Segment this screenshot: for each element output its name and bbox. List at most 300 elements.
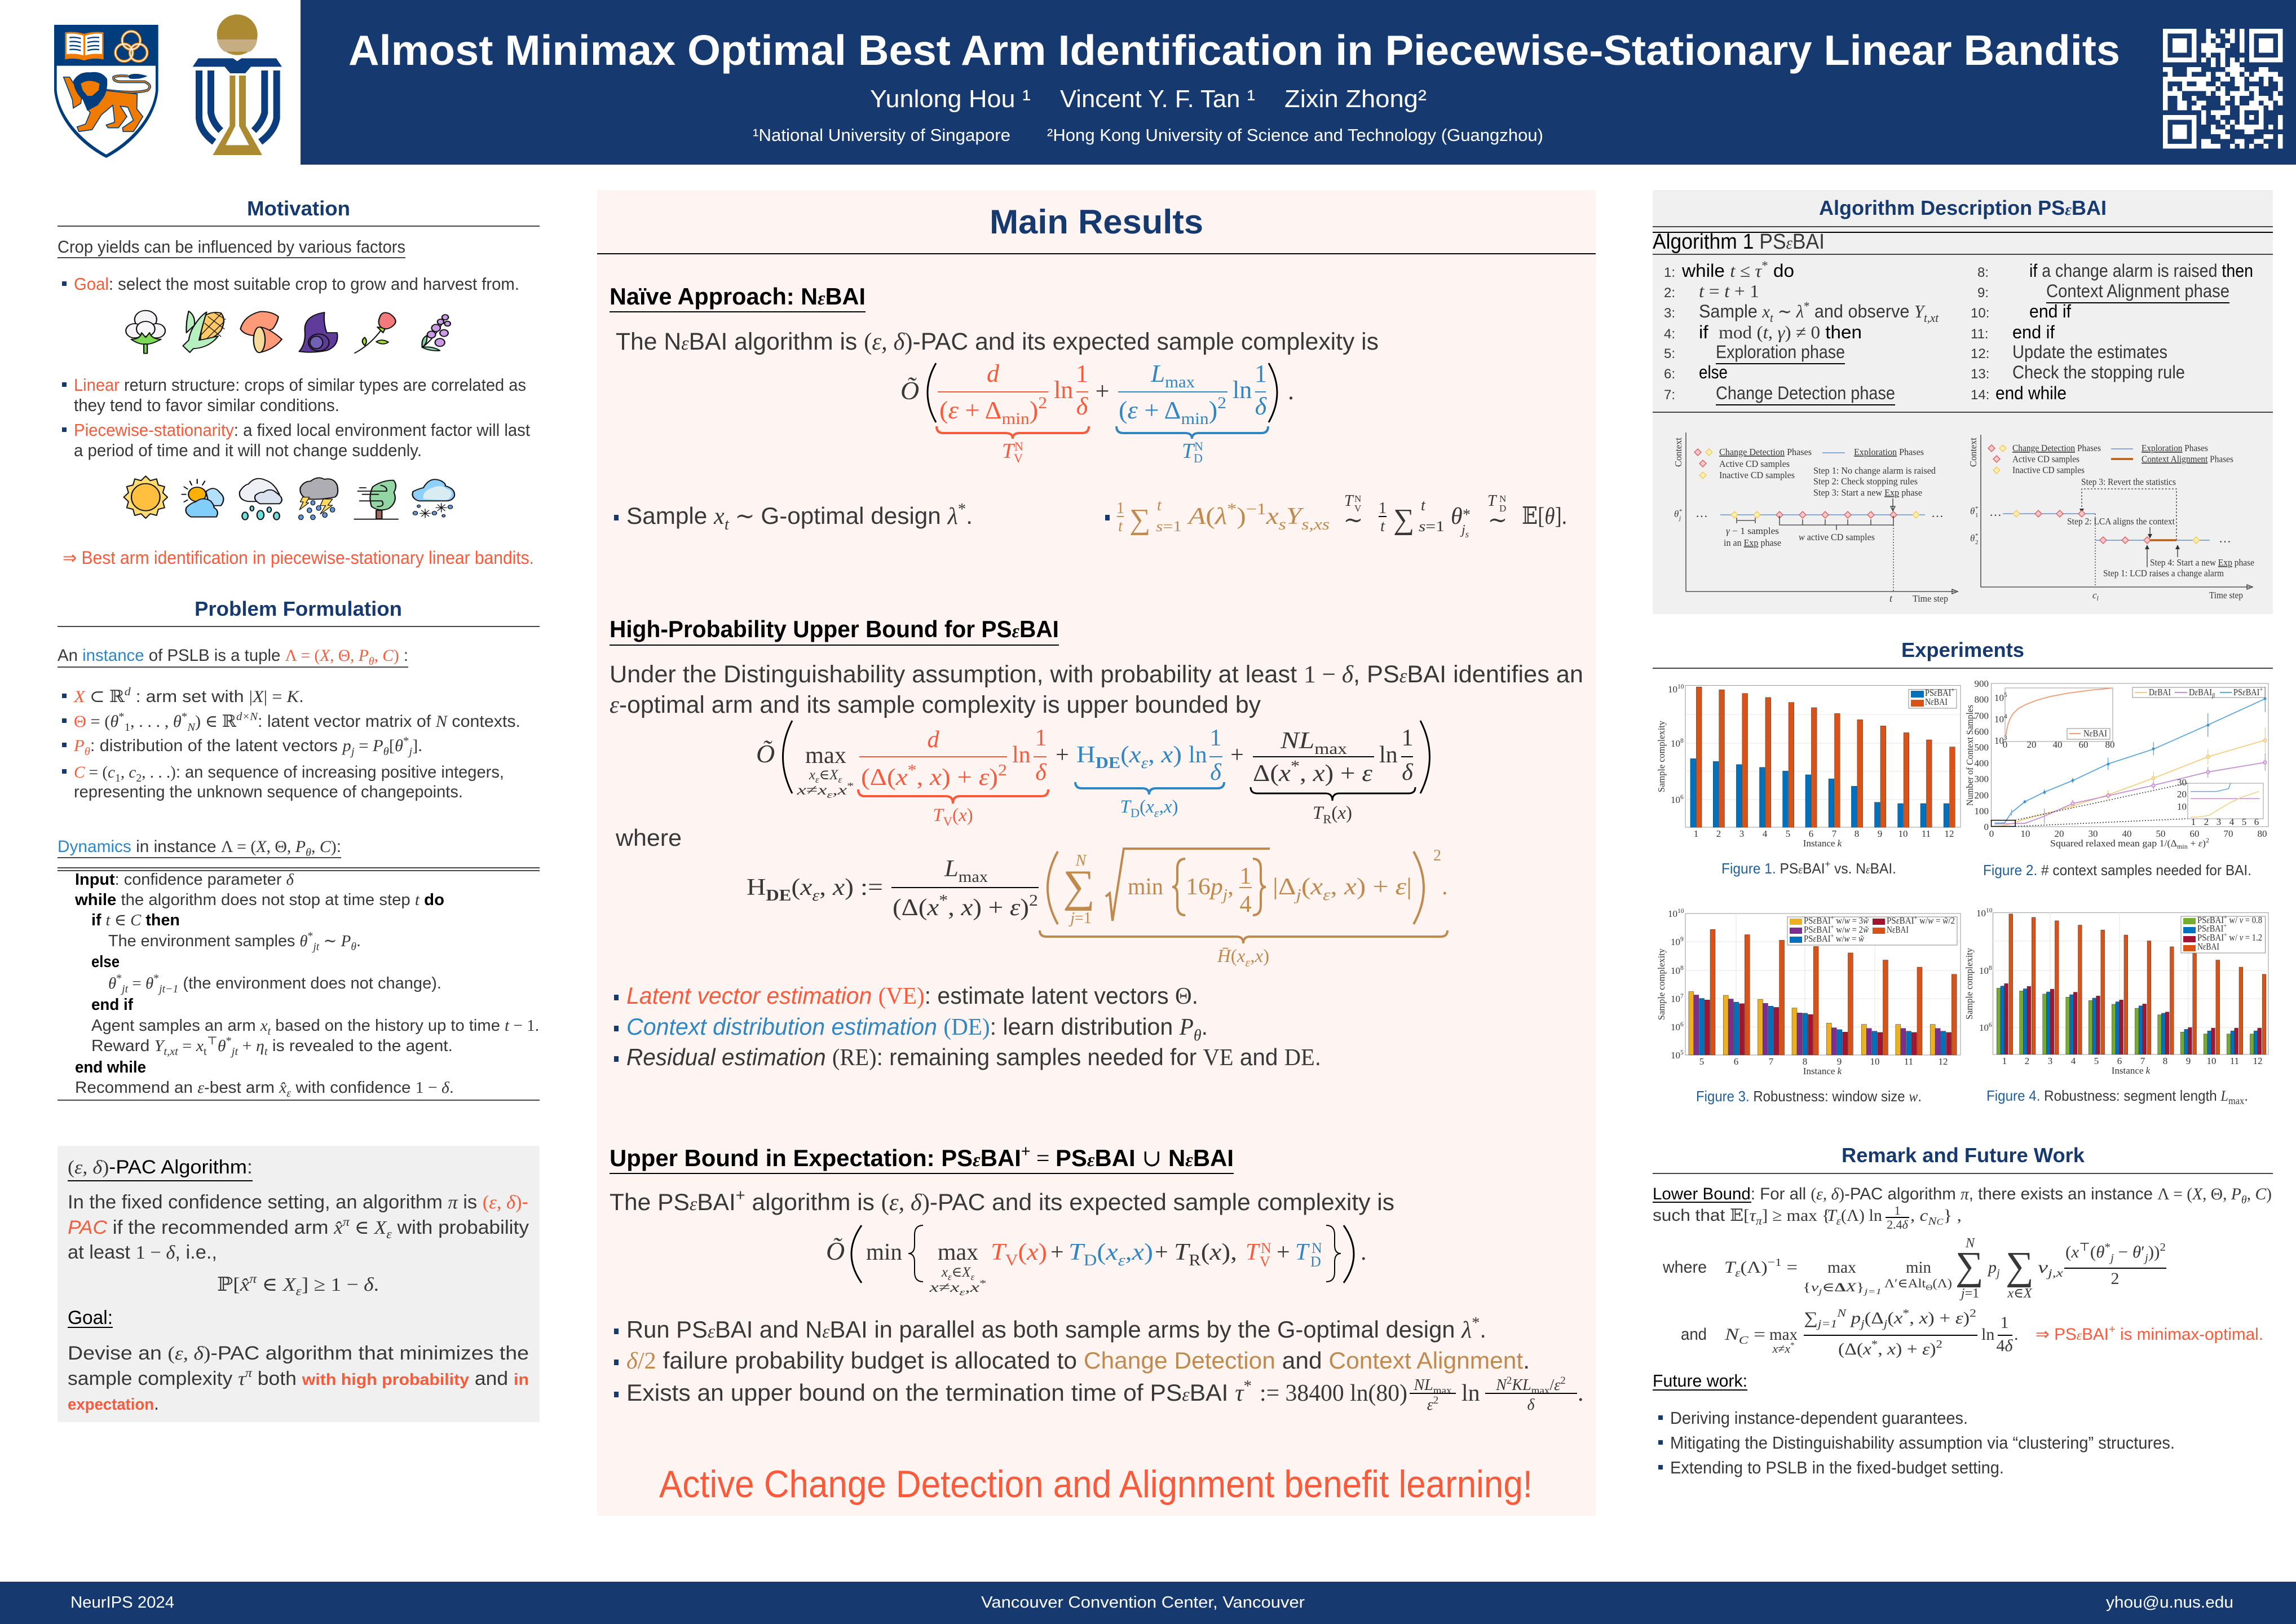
algorithm box: dynamics (58, 868, 540, 1100)
brace label: T_R(x): TR(x) (1313, 803, 1352, 826)
formula: expectation bound: N (1312, 1240, 1322, 1256)
formula: expectation bound: TR(x), (1174, 1239, 1237, 1269)
formula: H_DE definition: HDE(xε, x) := (747, 875, 883, 904)
formula: naive complexity: 1 (1076, 360, 1088, 387)
bullets: estimation components (614, 982, 1321, 1071)
inset: zoomed low-gap region: 5 (2242, 817, 2246, 827)
diagram: context alignment phases: Context Alignment Phases (2142, 453, 2233, 465)
inset: NεBAI curve: 105 (1994, 691, 2007, 703)
formula: N_C definition: 4δ (1997, 1336, 2014, 1355)
brace label: T_V^N: N (1014, 439, 1023, 453)
bullet: piecewise-stationarity: Piecewise-stationarity: a fixed local environment factor will last (74, 420, 530, 440)
bullets: estimation components: Context distribution estimation (DE): learn distribution Pθ. (626, 1013, 1208, 1044)
diagram: context alignment phases: θ (1970, 533, 1975, 544)
tick labels: 30 (2089, 828, 2098, 839)
text: goal description: sample complexity τπ both with high probability and in (68, 1366, 529, 1389)
diagram: context alignment phases: … (2219, 531, 2231, 545)
bullet: estimator convergence formula: t (1421, 497, 1426, 514)
formula: naive complexity: δ (1255, 392, 1268, 420)
formula: naive complexity: (ε + Δmin)2 (939, 394, 1047, 428)
bullet: estimator convergence formula: ∼ (1487, 508, 1508, 533)
callout: best arm identification: ⇒ Best arm identification in piecewise-stationary linear bandits. (63, 548, 534, 568)
algorithm box: dynamics: end while (75, 1058, 146, 1076)
tick labels: 100 (1975, 806, 1989, 817)
diagram: change detection phases: Step 1: No change alarm is raised (1813, 465, 1936, 476)
diagram: context alignment phases: 1 (1975, 512, 1978, 519)
bullets: problem definitions: X ⊂ ℝd : arm set with |X| = K. (73, 686, 304, 706)
formula: high-probability bound: + (1056, 742, 1069, 768)
axis labels: 8 (1803, 1056, 1807, 1067)
axis labels: 8 (1855, 828, 1859, 839)
bullet: estimator convergence formula: 1 (1379, 500, 1387, 517)
algorithm listing: right column: 11: (1971, 326, 1989, 342)
subheading: naive approach: Naïve Approach: NεBAI (610, 283, 866, 310)
inset: zoomed low-gap region: 4 (2229, 817, 2235, 827)
axis labels: 3 (1739, 828, 1744, 839)
formula: high-probability bound (756, 721, 1430, 800)
formula: expectation bound: Õ (826, 1237, 845, 1265)
algorithm box: dynamics: else (91, 953, 120, 971)
panel: motivation (58, 197, 540, 568)
caption: figure 1: Figure 1. PSεBAI+ vs. NεBAI. (1721, 858, 1896, 877)
algorithm listing: right column: Check the stopping rule (2012, 362, 2185, 382)
brace label: H-bar (1040, 930, 1447, 969)
heading: Algorithm Description: Algorithm Description PSεBAI (1819, 196, 2107, 219)
bullet: estimator convergence formula: D (1499, 503, 1506, 514)
text: lower bound: such that 𝔼[τπ] ≥ max { (1653, 1206, 1830, 1228)
formula: high-probability bound: ln (1012, 742, 1031, 768)
formula: high-probability bound: 1 (1035, 725, 1047, 751)
formula: naive complexity: ln (1054, 376, 1073, 404)
inset: NεBAI curve: 80 (2105, 739, 2114, 750)
axis labels (1964, 907, 2262, 1076)
bullets: algorithm properties: δ (1527, 1396, 1535, 1414)
markers (2023, 697, 2267, 807)
bullet: estimator convergence formula: V (1354, 503, 1362, 514)
diagram: change detection phases: Context (1673, 438, 1684, 467)
legend: NεBAI (1925, 696, 1948, 707)
formula: T_ε definition: max (1827, 1258, 1856, 1277)
axis labels: 6 (1809, 828, 1813, 839)
formula: high-probability bound: max (805, 743, 846, 769)
bullet: estimator convergence formula: t (1157, 497, 1162, 514)
diagram: context alignment phases: * (1975, 505, 1978, 512)
bullets: problem definitions: representing the unknown sequence of changepoints. (74, 783, 463, 801)
bullet: linear return structure: they tend to favor similar conditions. (74, 395, 339, 415)
axis labels: 12 (1939, 1056, 1948, 1067)
axis labels: 5 (2094, 1056, 2099, 1066)
formula: high-probability bound: Õ (756, 739, 775, 768)
bullets: algorithm properties: δ/2 failure probability budget is allocated to Change Detection and Context Alignment. (626, 1347, 1530, 1374)
axis labels: 4 (2071, 1056, 2076, 1066)
brace label: T_D(x,x): TD(xε,x) (1120, 797, 1178, 820)
bullet: goal: Goal: select the most suitable crop to grow and harvest from. (74, 274, 519, 294)
diagram: change detection phases: Exploration Phases (1854, 447, 1924, 457)
tick labels: 800 (1975, 694, 1989, 705)
axis labels: Sample complexity (1964, 948, 1975, 1020)
text: lower bound: 1 (1895, 1203, 1900, 1217)
heading: Main Results: Main Results (990, 203, 1203, 241)
text: lower bound: Lower Bound: For all (ε, δ)-PAC algorithm π, there exists an instance Λ = (X, Θ, Pθ, C) (1653, 1185, 2272, 1206)
axis labels: Sample complexity (1656, 948, 1667, 1020)
axis labels: 1010 (1976, 907, 1993, 919)
heading: Experiments: Experiments (1901, 638, 2024, 661)
algorithm box: dynamics: if t ∈ C then (91, 911, 180, 929)
icon: rose (355, 312, 396, 353)
axis labels: 3 (2048, 1056, 2052, 1066)
diagram: change detection phases: t (1889, 593, 1893, 604)
callout: active change detection: Active Change Detection and Alignment benefit learning! (659, 1463, 1533, 1506)
bars: segment lengths (1997, 914, 2266, 1054)
bullets: estimation components: Residual estimation (RE): remaining samples needed for VE and DE. (626, 1044, 1321, 1071)
algorithm listing: left column: 6: (1664, 367, 1675, 382)
legend: NεBAI (1887, 924, 1909, 935)
inset: NεBAI curve: 20 (2026, 739, 2037, 750)
formula: expectation bound: max (938, 1239, 978, 1265)
algorithm listing: left column: Exploration phase (1716, 342, 1845, 362)
diagram: context alignment phases: Step 2: LCA aligns the context (2067, 516, 2175, 527)
legend: PSεBAI+ (2233, 686, 2263, 698)
bullet: estimator convergence formula: T (1487, 492, 1498, 510)
algorithm listing: left column: 3: (1664, 306, 1675, 321)
formula: high-probability bound: (Δ(x*, x) + ε)2 (861, 762, 1007, 791)
formula: H_DE definition: 2 (1433, 847, 1441, 864)
algorithm listing: left column: while t ≤ τ* do (1681, 259, 1794, 281)
formula: H_DE definition: . (1442, 874, 1448, 900)
diagram: change detection phases: Inactive CD samples (1719, 470, 1795, 480)
inset: zoomed low-gap region: 2 (2204, 817, 2209, 827)
bullets: future work: Extending to PSLB in the fixed-budget setting. (1670, 1458, 2004, 1477)
axis labels: 6 (2117, 1056, 2122, 1066)
formula: expectation bound (826, 1225, 1367, 1298)
axis labels: 5 (1699, 1056, 1704, 1067)
algorithm listing: right column: 14: (1971, 387, 1989, 403)
axis labels: 4 (1763, 828, 1768, 839)
diagram: context alignment phases: Inactive CD samples (2012, 465, 2085, 475)
axis labels: 105 (1671, 1049, 1684, 1061)
algorithm box: dynamics: Input: confidence parameter δ (75, 871, 294, 889)
algorithm listing: right column: end if (2029, 301, 2071, 321)
chart: figure 4 bars (1964, 907, 2268, 1076)
panel: PAC algorithm (58, 1146, 540, 1422)
panel: experiments (1653, 638, 2273, 1106)
diagram: change detection phases: Step 2: Check stopping rules (1813, 476, 1918, 487)
legend (2132, 686, 2265, 699)
text: naive claim: The NεBAI algorithm is (ε, δ)-PAC and its expected sample complexity is (616, 328, 1379, 355)
bullet: estimator convergence formula: N (1354, 493, 1361, 504)
icon: corn (183, 311, 226, 352)
formula: naive complexity: + (1096, 377, 1109, 405)
legend: DεBAIβ (2189, 687, 2215, 699)
text: PAC definition: In the fixed confidence setting, an algorithm π is (ε, δ)- (68, 1191, 528, 1213)
axis labels: Instance k (1803, 1066, 1842, 1076)
text: goal description: Devise an (ε, δ)-PAC algorithm that minimizes the (68, 1343, 529, 1364)
heading: Problem Formulation: Problem Formulation (195, 597, 402, 620)
diagram: change detection phases: Time step (1913, 593, 1948, 604)
diagram: context alignment phases: cl (2092, 590, 2099, 602)
bullet: estimator convergence formula: ∑ (1393, 504, 1414, 536)
text: high-probability claim: ε-optimal arm and its sample complexity is upper bounded by (610, 691, 1261, 718)
tick labels: 700 (1975, 710, 1989, 721)
text: lower bound: , cNC} , (1910, 1206, 1962, 1228)
bullets: future work (1658, 1408, 2175, 1477)
tick labels: 200 (1975, 790, 1989, 801)
axis labels: Instance k (2112, 1065, 2151, 1076)
diagram: change detection phases (1673, 433, 1958, 604)
diagram: context alignment phases: Step 4: Start a new Exp phase (2150, 557, 2254, 568)
algorithm listing: left column: Sample xt ∼ λ* and observe Yt,xt (1699, 299, 1939, 325)
bullets: algorithm properties: Exists an upper bound on the termination time of PS εBAI τ* (626, 1378, 1252, 1406)
formula: expectation bound: TV(x) (991, 1239, 1047, 1269)
formula: T_ε definition: where (1662, 1258, 1707, 1277)
algorithm listing: left column: else (1699, 362, 1728, 382)
formula: expectation bound: xε∈Xε (941, 1265, 974, 1282)
formula: H_DE definition: 4 (1239, 892, 1252, 917)
algorithm listing: right column: 12: (1971, 346, 1989, 361)
diagram: change detection phases: Step 3: Start a new Exp phase (1813, 487, 1922, 498)
section: naive approach (610, 283, 1567, 540)
axis labels (1656, 907, 1948, 1076)
formula: H_DE definition: min (1128, 874, 1163, 900)
caption: figure 3: Figure 3. Robustness: window size w. (1696, 1088, 1922, 1105)
subheading: instance tuple: An instance of PSLB is a tuple Λ = (X, Θ, Pθ, C) : (58, 646, 408, 668)
algorithm listing: right column (1971, 261, 2253, 403)
heading: PAC algorithm: (ε, δ)-PAC Algorithm : (68, 1157, 253, 1178)
brace label: T_D(x,x) (1075, 782, 1224, 820)
legend: PSεBAI+ (1925, 686, 1954, 698)
icons: weather (124, 476, 454, 520)
inset: NεBAI curve: NεBAI (2083, 728, 2107, 739)
formula: T_ε definition: {v j∈ ΔX} j=1 (1803, 1280, 1882, 1296)
footer: conference: NeurIPS 2024 (70, 1594, 174, 1612)
formula: high-probability bound: xε∈Xε (809, 767, 842, 785)
axis labels: 106 (1671, 1021, 1684, 1032)
text: where: where (615, 824, 682, 851)
formula: N_C definition: (Δ(x*, x) + ε)2 (1838, 1338, 1942, 1358)
algorithm box: dynamics: Recommend an ε-best arm x̂ε with confidence 1 − δ. (75, 1079, 454, 1100)
formula: high-probability bound: HDE(xε, x) (1076, 742, 1182, 772)
tick labels (1964, 678, 2267, 850)
bullet: piecewise-stationarity: a period of time and it will not change suddenly. (74, 440, 422, 460)
formula: expectation bound: + (1050, 1239, 1064, 1265)
formula: H_DE definition: j=1 (1068, 910, 1092, 927)
formula: T_ε definition: N (1965, 1236, 1976, 1251)
icon: QR code (2163, 29, 2282, 149)
formula: T_ε definition: 2 (2111, 1269, 2119, 1288)
bullets: problem definitions: C = (c1, c2, . . .): an sequence of increasing positive integers, (74, 763, 504, 784)
affiliations: ¹National University of Singapore (753, 125, 1010, 145)
brace label: T_V(x): TV(x) (933, 805, 973, 828)
text: PAC definition: PAC if the recommended arm x̂π ∈ Xε with probability (68, 1215, 529, 1242)
formula: high-probability bound: NL max (1280, 728, 1347, 758)
axis labels: 5 (1786, 828, 1790, 839)
bullet: piecewise-stationarity (62, 420, 530, 460)
algorithm listing: left column: if mod (t, γ) ≠ 0 then (1699, 322, 1862, 342)
bullet: estimator convergence formula: s=1 (1156, 518, 1182, 535)
panel: algorithm description (1653, 190, 2273, 614)
algorithm listing: right column: 10: (1971, 306, 1989, 321)
footer (0, 1582, 2296, 1624)
axis labels: 7 (1832, 828, 1837, 839)
formula: T_ε definition: ∑ (2006, 1245, 2034, 1288)
subheading: dynamics: Dynamics in instance Λ = (X, Θ, Pθ, C): (58, 837, 341, 859)
bullet: estimator convergence formula: t (1118, 518, 1123, 535)
brace label: H-bar: H̄(xε,x) (1217, 946, 1269, 969)
formula: high-probability bound: ln (1189, 742, 1207, 768)
axis labels: 11 (1922, 828, 1931, 839)
diagram: change detection phases: w active CD samples (1799, 532, 1875, 542)
axis labels: 1 (1694, 828, 1698, 839)
axis labels: 6 (1734, 1056, 1738, 1067)
formula: high-probability bound: 1 (1402, 725, 1413, 751)
bars: window sizes (1689, 929, 1957, 1055)
subheading: crop yields: Crop yields can be influenced by various factors (58, 237, 405, 257)
axis labels: Sample complexity (1656, 721, 1667, 792)
tick labels: Number of Context Samples (1964, 705, 1975, 806)
algorithm box: dynamics: Reward Yt,xt = xt⊤θ*jt + ηt is revealed to the agent. (91, 1035, 453, 1058)
formula: T_ε definition: min (1906, 1258, 1931, 1277)
text: PAC definition: ℙ[x̂π ∈ Xε] ≥ 1 − δ. (217, 1272, 379, 1299)
tick labels: Squared relaxed mean gap 1/(Δ min + ε)2 (2050, 837, 2209, 850)
bullet: estimator convergence formula (1105, 492, 1567, 540)
brace label: T_R(x) (1251, 787, 1415, 826)
bullets: algorithm properties: . (1578, 1380, 1583, 1406)
legend: PSεBAI+ w/w = 3w̃ (1804, 914, 1869, 926)
bullet: estimator convergence formula: 1 (1116, 500, 1124, 517)
formula: N_C definition: x≠x* (1772, 1341, 1795, 1356)
axis labels: 9 (1878, 828, 1882, 839)
bullet: estimator convergence formula: t (1380, 518, 1385, 535)
inset: zoomed low-gap region: 1 (2191, 817, 2196, 827)
affiliations: ²Hong Kong University of Science and Technology (Guangzhou) (1047, 125, 1543, 145)
bullet: estimator convergence formula: js (1460, 523, 1469, 540)
legend: DεBAI (2149, 687, 2171, 698)
axis labels: 106 (1671, 793, 1684, 805)
algorithm box: dynamics: θ*jt = θ*jt−1 (the environment does not change). (108, 972, 441, 995)
algorithm listing: left column: 2: (1664, 285, 1675, 301)
formula: expectation bound: D (1310, 1254, 1321, 1270)
diagram: context alignment phases (1968, 435, 2254, 602)
formula: H_DE definition: ∑ (1063, 862, 1095, 911)
affiliations (753, 125, 1543, 145)
inset: zoomed low-gap region: 20 (2177, 789, 2187, 800)
formula: high-probability bound: + (1230, 742, 1244, 768)
icon: snow cloud (413, 479, 454, 518)
axis labels: 8 (2163, 1056, 2167, 1066)
icon: rain cloud (240, 479, 282, 520)
diagram: context alignment phases: Context (1968, 438, 1979, 467)
diagram: change detection phases: * (1679, 508, 1683, 515)
inset: zoomed low-gap region: 30 (2177, 777, 2187, 788)
tick labels: 40 (2122, 828, 2131, 839)
line series (1992, 687, 2265, 827)
axis labels: 7 (1769, 1056, 1774, 1067)
axis labels: 12 (1944, 828, 1954, 839)
formula: N_C definition: NC = (1724, 1325, 1765, 1347)
algorithm listing: left column: 7: (1664, 387, 1675, 403)
inset: NεBAI curve: 40 (2052, 739, 2063, 750)
axis labels: 2 (1716, 828, 1721, 839)
bullets: algorithm properties (614, 1314, 1583, 1414)
authors: Vincent Y. F. Tan ¹ (1060, 85, 1255, 113)
tick labels: 300 (1975, 774, 1989, 784)
logo: NUS shield (54, 25, 158, 158)
inset: zoomed low-gap region: 10 (2177, 801, 2187, 812)
axis labels: 10 (1870, 1056, 1880, 1067)
formula: high-probability bound: Δ(x*, x) + ε (1253, 758, 1372, 787)
bullet: estimator convergence formula: A(λ*)−1xsYs,xs (1186, 501, 1330, 533)
diagram: change detection phases: j (1678, 515, 1681, 522)
diagram: context alignment phases: 2 (1975, 539, 1978, 546)
bullets: future work: Deriving instance-dependent guarantees. (1670, 1408, 1968, 1428)
diagram: change detection phases: in an Exp phase (1724, 537, 1781, 548)
text: lower bound: 2.4δ (1887, 1217, 1909, 1232)
axis labels: 108 (1979, 964, 1992, 976)
bullet: estimator convergence formula: * (1463, 506, 1471, 524)
bullet: linear return structure: Linear return structure: crops of similar types are correlated as (74, 375, 526, 395)
axis labels: 1010 (1668, 907, 1684, 919)
diagram: context alignment phases: Exploration Phases (2142, 443, 2208, 453)
bullet: linear return structure (62, 375, 526, 415)
diagram: change detection phases: θ (1674, 509, 1679, 519)
bullets: algorithm properties: N2KLmax/ε2 (1495, 1375, 1566, 1397)
bullet: estimator convergence formula: ∼ (1343, 508, 1363, 533)
axis labels: 1 (2002, 1056, 2007, 1066)
formula: expectation bound: V (1260, 1254, 1270, 1270)
bullet: estimator convergence formula: T (1344, 492, 1354, 510)
chart: figure 1 bars (1656, 683, 1961, 849)
formula: naive complexity: (ε + Δmin)2 (1119, 394, 1226, 428)
formula: N_C definition: and (1681, 1325, 1707, 1344)
text: lower bound: Tε(Λ) ln (1827, 1206, 1882, 1228)
icons: crops (126, 311, 451, 354)
formula: expectation bound: + (1277, 1239, 1290, 1265)
algorithm listing: left column: Change Detection phase (1716, 383, 1895, 403)
text: high-probability claim (610, 661, 1583, 718)
tick labels: 50 (2156, 828, 2165, 839)
diagram: change detection phases: γ − 1 samples (1726, 526, 1779, 536)
axis labels: 12 (2253, 1056, 2262, 1066)
diagram: change detection phases: Change Detection Phases (1719, 447, 1812, 457)
formula: high-probability bound: x≠ x ε,x * (796, 780, 854, 800)
bullets: estimation components: Latent vector estimation (VE): estimate latent vectors Θ. (626, 982, 1198, 1009)
axis labels: 7 (2140, 1056, 2145, 1066)
header banner (301, 0, 2296, 165)
formula: H_DE definition: 1 (1239, 863, 1252, 889)
algorithm box: dynamics: Agent samples an arm xt based on the history up to time t − 1. (91, 1017, 539, 1038)
axis labels: 107 (1671, 992, 1684, 1004)
diagram: change detection phases: … (1931, 506, 1944, 520)
diagram: change detection phases: … (1695, 506, 1708, 520)
icon: sun (124, 476, 167, 518)
algorithm listing: right column: if a change alarm is raised then (2029, 261, 2253, 281)
formula: naive complexity: Lmax (1150, 360, 1195, 391)
heading: future work: Future work: (1653, 1371, 1747, 1391)
algorithm listing: left column: 4: (1664, 326, 1675, 342)
formula: T_ε definition: ∑ (1955, 1245, 1984, 1288)
axis labels: 11 (1904, 1056, 1913, 1067)
diagram: context alignment phases: … (1989, 505, 2002, 519)
panel: main results (597, 190, 1596, 1516)
formula: expectation bound: x≠ x ε,x * (929, 1278, 987, 1298)
formula: naive complexity: 1 (1255, 360, 1267, 387)
text: PAC definition (68, 1191, 529, 1299)
formula: expectation bound: + (1155, 1239, 1168, 1265)
algorithm title: Algorithm 1 PSεBAI (1653, 230, 1825, 254)
inset: zoomed low-gap region: 6 (2254, 817, 2259, 827)
icon: lavender (422, 315, 451, 351)
bars: PSεBAI+ (1690, 687, 1955, 827)
